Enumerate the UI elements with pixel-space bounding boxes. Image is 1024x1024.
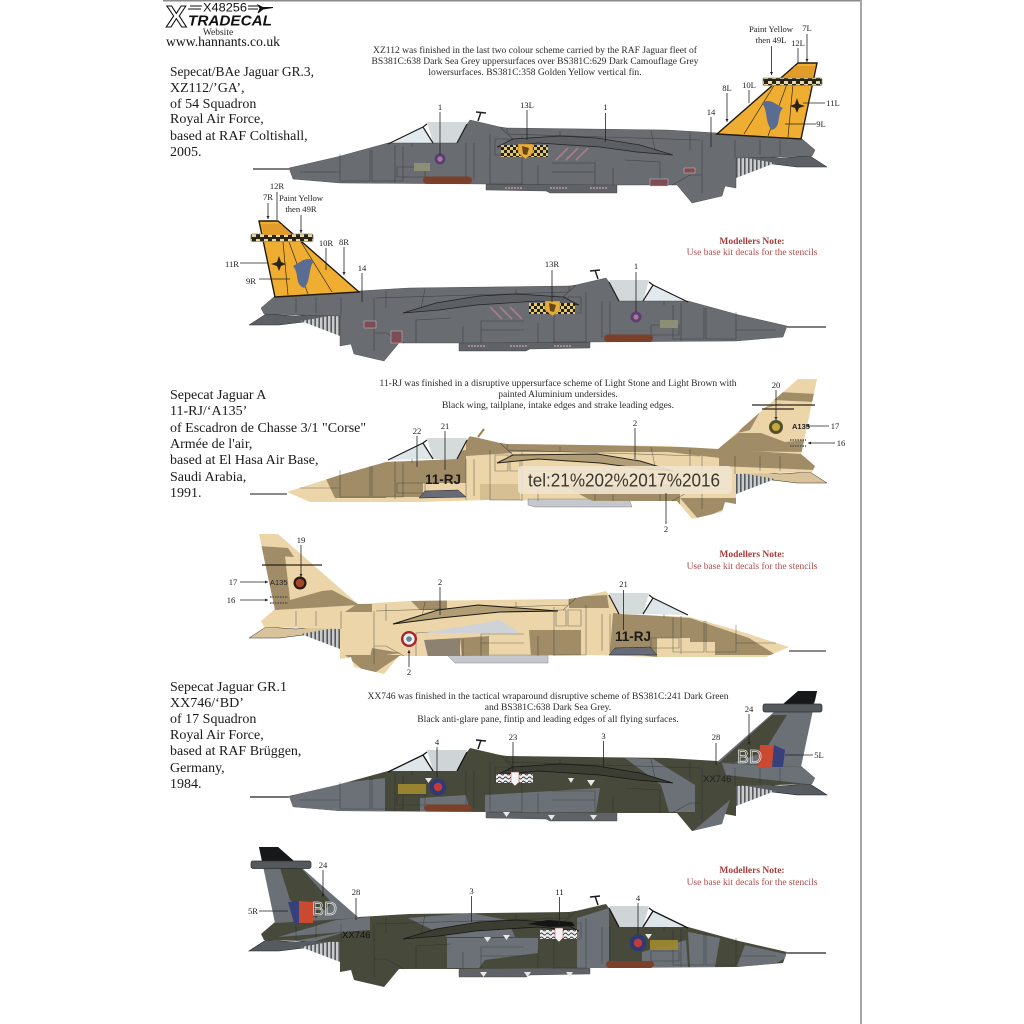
serial 11-RJ: 11-RJ: [615, 628, 651, 644]
roundel: [430, 778, 446, 796]
callouts: aircraft 2: 10R: [319, 238, 333, 248]
callouts: aircraft 1: Paint Yellow: [749, 24, 794, 34]
callouts: aircraft 3: 22: [413, 426, 421, 436]
squadron wave marking: [496, 772, 533, 786]
text block: aircraft 3 description: 1991.: [170, 486, 202, 501]
aircraft 4: Jaguar A 11-RJ right side: [249, 534, 826, 676]
fin marking A135: A135: [270, 578, 288, 587]
modellers note 3: [687, 866, 818, 888]
callouts: aircraft 6: 4: [636, 893, 641, 903]
callouts: aircraft 4: [227, 535, 628, 677]
fuselage checker squadron marking: [501, 144, 548, 159]
nose stencil block: [650, 940, 678, 950]
callouts: aircraft 6: 11: [555, 887, 564, 897]
text block: aircraft 3 description: 11-RJ/‘A135’: [170, 404, 247, 419]
fin code BD: BD: [312, 899, 337, 919]
callouts: aircraft 1: 13L: [520, 100, 534, 110]
wing underside hatching: [556, 148, 588, 160]
text block: aircraft 3 description: Saudi Arabia,: [170, 470, 246, 485]
text block: aircraft 3 description: Armée de l'air,: [170, 437, 252, 452]
pitot bars on fin: [752, 405, 815, 409]
aluminium intake: [419, 490, 466, 498]
text block: aircraft 5 description: based at RAF Brüggen,: [170, 744, 301, 759]
text block: scheme note XX746: and BS381C:638 Dark Sea Grey.: [485, 702, 611, 713]
text block: scheme note XZ112: lowersurfaces. BS381C:358 Golden Yellow vertical fin.: [428, 67, 642, 78]
roundel: [434, 154, 446, 164]
wing: [403, 920, 579, 939]
callouts: aircraft 2: 14: [358, 263, 367, 273]
callouts: aircraft 5: [435, 704, 824, 778]
wing with black edge: [497, 454, 673, 471]
camouflage: light brown patches: [325, 436, 815, 520]
fin badge: [294, 576, 306, 590]
text block: aircraft 3 description: of Escadron de Chasse 3/1 "Corse": [170, 421, 366, 436]
fin camouflage: [259, 847, 332, 918]
text block: aircraft 1 description: XZ112/’GA’,: [170, 81, 245, 96]
fin camouflage: [715, 392, 818, 452]
text block: scheme note XX746: [367, 691, 729, 725]
text block: aircraft 1 description: 2005.: [170, 145, 202, 160]
aircraft 3: Jaguar A 11-RJ left side: [250, 379, 827, 520]
camouflage: light brown patches: [345, 595, 776, 676]
stencils: [414, 163, 430, 171]
wing with black edge: [393, 605, 558, 624]
callouts: aircraft 3: 17: [831, 421, 840, 431]
modellers note 2: Modellers Note:: [719, 550, 785, 560]
fin: golden yellow: [251, 221, 359, 297]
fin code BD: BD: [737, 747, 762, 767]
text block: aircraft 3 description: Sepecat Jaguar A: [170, 388, 267, 403]
stencils: [660, 320, 678, 328]
callouts: aircraft 1: 14: [707, 107, 716, 117]
callouts: aircraft 4: 17: [229, 577, 238, 587]
text block: aircraft 3 description: based at El Hasa Air Base,: [170, 453, 319, 468]
fin band: [763, 704, 822, 712]
callouts: aircraft 2: [225, 181, 638, 312]
aluminium intake: [609, 647, 657, 655]
text block: scheme note XX746: XX746 was finished in the tactical wraparound disruptive scheme of BS381C:241 Dark Green: [367, 691, 729, 702]
callouts: aircraft 5: 4: [435, 737, 440, 747]
text block: aircraft 1 description: Royal Air Force,: [170, 112, 264, 127]
callouts: aircraft 3: 16: [837, 438, 846, 448]
callouts: aircraft 3: 2: [664, 524, 668, 534]
callouts: aircraft 4: 16: [227, 595, 236, 605]
callouts: aircraft 5: 24: [745, 704, 754, 714]
callouts: aircraft 2: 7R: [263, 192, 273, 202]
text block: scheme note XX746: Black anti-glare pane, fintip and leading edges of all flying surfaces.: [417, 714, 679, 725]
callouts: aircraft 2: Paint Yellow: [279, 193, 324, 203]
brown intake fairing: [423, 176, 472, 184]
text block: aircraft 5 description: XX746/‘BD’: [170, 696, 244, 711]
fin band: [251, 861, 311, 868]
text block: aircraft 5 description: 1984.: [170, 777, 202, 792]
camouflage: dark sea grey patches: [288, 758, 815, 832]
callouts: aircraft 1: 10L: [742, 80, 756, 90]
callouts: aircraft 2: 9R: [246, 276, 256, 286]
text block: scheme note 11-RJ: [379, 378, 737, 411]
text block: aircraft 1 description: of 54 Squadron: [170, 97, 256, 112]
sheet edge right: [860, 0, 862, 1024]
text block: aircraft 5 description: Sepecat Jaguar GR.1: [170, 680, 287, 695]
fin: golden yellow: [717, 63, 822, 139]
silver fuel tank: [447, 655, 548, 663]
callouts: aircraft 6: 3: [469, 886, 474, 896]
overlay caption: tel: tel:21%202%2017%2016: [528, 470, 720, 490]
fin flash: [758, 745, 785, 767]
text block: scheme note XZ112: [372, 45, 699, 78]
fin stencil: [270, 597, 288, 603]
modellers note 1: Use base kit decals for the stencils: [687, 247, 818, 258]
modellers note 1: Modellers Note:: [719, 237, 785, 247]
brown intake fairing: [604, 334, 653, 342]
callouts: aircraft 5: 28: [712, 732, 720, 742]
callouts: aircraft 5: 5L: [814, 750, 824, 760]
fuselage checker squadron marking: [529, 301, 575, 316]
text block: scheme note 11-RJ: 11-RJ was finished in a disruptive uppersurface scheme of Light Stone and Light Brown with: [379, 378, 737, 389]
text block: scheme note XZ112: XZ112 was finished in the last two colour scheme carried by the RAF Jaguar fleet of: [373, 45, 698, 56]
brown intake fairing: [424, 804, 472, 812]
callouts: aircraft 3: [413, 380, 846, 534]
callouts: aircraft 1: 9L: [816, 119, 826, 129]
text block: aircraft 5 description: Germany,: [170, 761, 225, 776]
callouts: aircraft 3: 20: [772, 380, 780, 390]
modellers note 3: Modellers Note:: [719, 866, 785, 876]
callouts: aircraft 1: 8L: [722, 83, 732, 93]
squadron wave marking: [540, 928, 577, 942]
callouts: aircraft 5: 3: [601, 731, 606, 741]
text block: aircraft 5 description: of 17 Squadron: [170, 712, 256, 727]
fin flash: [288, 901, 313, 923]
callouts: aircraft 2: then 49R: [285, 204, 317, 214]
serial XX746: XX746: [342, 930, 371, 941]
overlay caption: tel: [518, 466, 732, 494]
callouts: aircraft 4: 2: [438, 577, 442, 587]
callouts: aircraft 2: 12R: [270, 181, 284, 191]
silver fuel tank: [528, 499, 632, 507]
modellers note 3: Use base kit decals for the stencils: [687, 877, 818, 888]
callouts: aircraft 4: 19: [297, 535, 305, 545]
logo stripes and jet: [188, 5, 273, 13]
modellers note 1: [687, 237, 818, 258]
callouts: aircraft 2: 8R: [339, 237, 349, 247]
callouts: aircraft 1: 12L: [791, 38, 805, 48]
wing: [497, 764, 673, 783]
roundel: [630, 312, 642, 322]
callouts: aircraft 4: 2: [407, 667, 411, 677]
modellers note 2: [687, 550, 818, 572]
callouts: aircraft 5: 23: [509, 732, 517, 742]
callouts: aircraft 1: 7L: [802, 23, 812, 33]
text block: aircraft 1 description: [170, 65, 314, 160]
roundel: [630, 934, 646, 952]
pitot bars on fin: [262, 564, 322, 566]
callouts: aircraft 1: then 49L: [756, 35, 786, 45]
callouts: aircraft 3: 21: [441, 421, 449, 431]
callouts: aircraft 1: [438, 23, 840, 155]
aircraft 6: Jaguar GR.1 XX746 right side: [249, 846, 826, 987]
white triangle markings: [480, 934, 652, 977]
callouts: aircraft 2: 11R: [225, 259, 239, 269]
logo mark X: X: [166, 0, 187, 34]
fin marking A135: A135: [792, 422, 810, 431]
callouts: aircraft 1: 1: [438, 102, 442, 112]
text block: aircraft 5 description: [170, 680, 301, 792]
tank stencils: [468, 345, 572, 347]
callouts: aircraft 6: [248, 860, 641, 935]
fin camouflage: [262, 546, 358, 610]
logo wordmark: TRADECAL: [188, 12, 272, 30]
aircraft 1: Jaguar GR.3 XZ112 left side: [253, 63, 827, 203]
aircraft 2: Jaguar GR.3 XZ112 right side: [249, 221, 826, 361]
white triangle markings: [425, 778, 597, 820]
callouts: aircraft 6: 24: [319, 860, 328, 870]
brown intake fairing: [606, 961, 654, 968]
serial XX746: XX746: [703, 774, 732, 785]
website url: www.hannants.co.uk: [166, 34, 280, 49]
text block: scheme note 11-RJ: Black wing, tailplane, intake edges and strake leading edges.: [442, 400, 674, 411]
black strake: [527, 920, 575, 927]
text block: aircraft 3 description: [170, 388, 366, 501]
callouts: aircraft 6: 5R: [248, 906, 258, 916]
text block: scheme note XZ112: BS381C:638 Dark Sea Grey uppersurfaces over BS381C:629 Dark Camouflage Grey: [372, 56, 699, 67]
wing underside hatching: [490, 307, 522, 319]
sheet edge top: [163, 0, 862, 2]
callouts: aircraft 2: 1: [634, 261, 638, 271]
text block: aircraft 5 description: Royal Air Force,: [170, 728, 264, 743]
callouts: aircraft 6: 28: [352, 887, 360, 897]
fin badge: [769, 420, 783, 434]
nose stencil block: [398, 784, 426, 794]
website label: Website: [203, 28, 233, 38]
text block: aircraft 1 description: based at RAF Coltishall,: [170, 129, 308, 144]
callouts: aircraft 3: 2: [633, 418, 637, 428]
logo: Xtradecal: [166, 0, 280, 49]
text block: aircraft 1 description: Sepecat/BAe Jaguar GR.3,: [170, 65, 314, 80]
text block: scheme note 11-RJ: painted Aluminium undersides.: [498, 389, 618, 400]
fin camouflage: [720, 691, 820, 763]
callouts: aircraft 1: 11L: [826, 98, 840, 108]
aircraft 5: Jaguar GR.1 XX746 left side: [250, 691, 827, 832]
camouflage: dark sea grey patches: [250, 908, 790, 968]
callouts: aircraft 1: 1: [603, 102, 608, 112]
serial 11-RJ: 11-RJ: [425, 471, 461, 487]
callouts: aircraft 4: 21: [619, 579, 628, 589]
roundel: French cockade: [401, 631, 417, 647]
modellers note 2: Use base kit decals for the stencils: [687, 561, 818, 572]
tank stencils: [505, 187, 608, 189]
fin stencil: [790, 440, 806, 446]
wing underside panel: [424, 620, 520, 633]
sheet number: X48256: [203, 0, 247, 14]
callouts: aircraft 2: 13R: [545, 259, 559, 269]
